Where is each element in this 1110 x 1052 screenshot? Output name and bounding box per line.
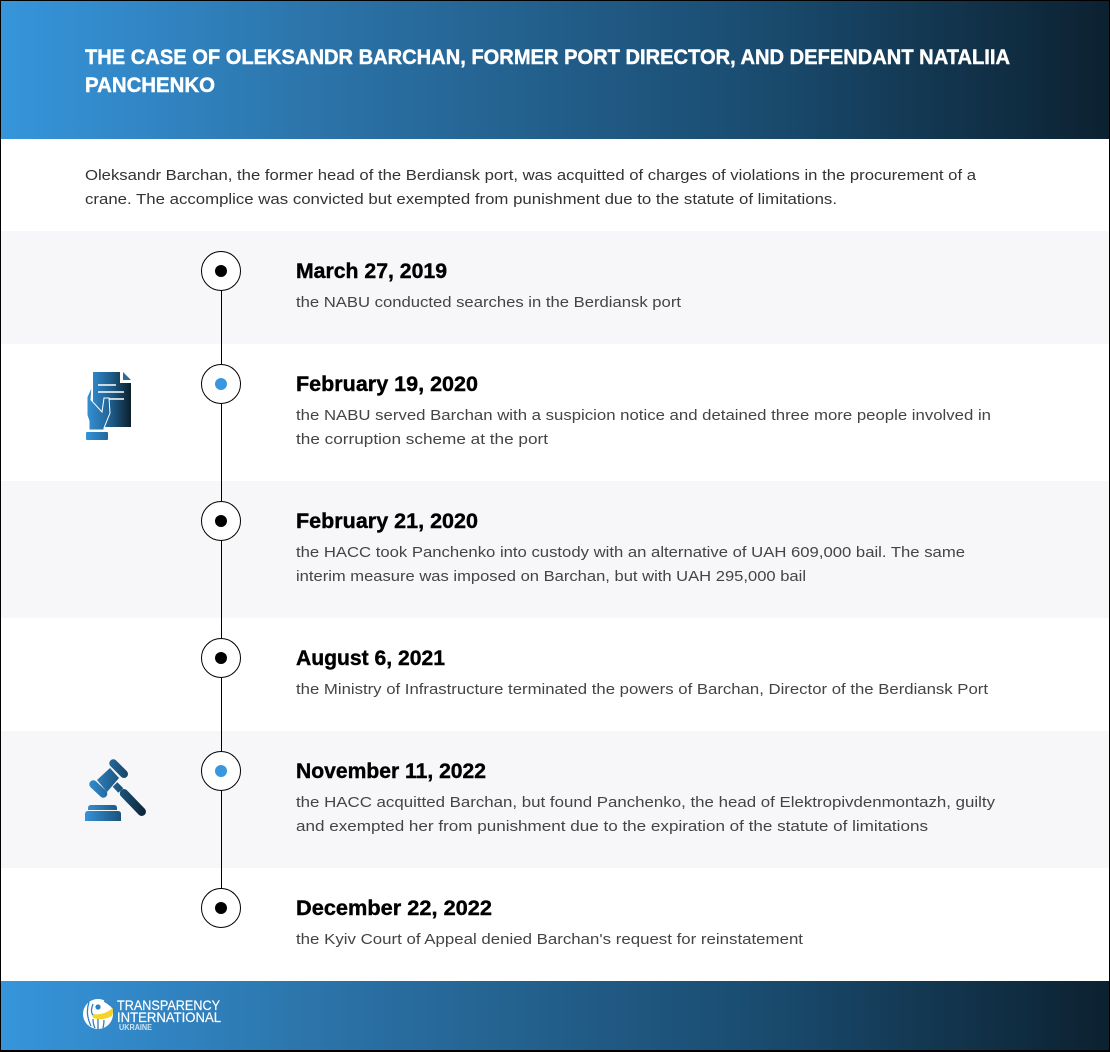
title bbox=[85, 46, 1010, 97]
intro text: Oleksandr Barchan, the former head of the Berdiansk port, was acquitted of charges of violations in the procurement of a bbox=[85, 167, 977, 184]
marker bbox=[202, 252, 240, 290]
marker bbox=[202, 888, 240, 928]
description: the corruption scheme at the port bbox=[296, 431, 549, 448]
description bbox=[296, 407, 991, 448]
date: February 21, 2020 bbox=[296, 510, 478, 533]
date: December 22, 2022 bbox=[296, 897, 492, 920]
description: the NABU served Barchan with a suspicion notice and detained three more people involved in bbox=[296, 407, 991, 424]
event: August 6, 2021 bbox=[202, 638, 989, 698]
description: the Kyiv Court of Appeal denied Barchan's request for reinstatement bbox=[296, 931, 804, 948]
marker bbox=[202, 752, 240, 790]
footer banner bbox=[0, 981, 1110, 1052]
date: March 27, 2019 bbox=[296, 260, 447, 283]
intro text bbox=[85, 167, 977, 208]
logo: Transparency International Ukraine bbox=[83, 997, 221, 1032]
logo wordmark: UKRAINE bbox=[119, 1023, 153, 1032]
event: March 27, 2019 bbox=[202, 252, 682, 311]
logo wordmark: TRANSPARENCY bbox=[117, 997, 221, 1013]
title: PANCHENKO bbox=[85, 74, 215, 97]
intro text: crane. The accomplice was convicted but exempted from punishment due to the statute of limitations. bbox=[85, 191, 837, 208]
description bbox=[296, 544, 965, 585]
event: February 21, 2020 bbox=[202, 502, 965, 585]
event: November 11, 2022 bbox=[202, 752, 996, 835]
event: February 19, 2020 bbox=[202, 364, 991, 448]
description: and exempted her from punishment due to the expiration of the statute of limitations bbox=[296, 818, 928, 835]
marker bbox=[202, 638, 240, 678]
title: THE CASE OF OLEKSANDR BARCHAN, FORMER PORT DIRECTOR, AND DEFENDANT NATALIIA bbox=[85, 46, 1010, 69]
date: August 6, 2021 bbox=[296, 647, 445, 670]
description: the Ministry of Infrastructure terminated the powers of Barchan, Director of the Berdiansk Port bbox=[296, 681, 989, 698]
timeline line bbox=[221, 271, 222, 908]
description: the NABU conducted searches in the Berdiansk port bbox=[296, 294, 682, 311]
date: November 11, 2022 bbox=[296, 760, 486, 783]
description: the HACC acquitted Barchan, but found Panchenko, the head of Elektropivdenmontazh, guilty bbox=[296, 794, 996, 811]
logo wordmark bbox=[117, 997, 221, 1032]
row backgrounds bbox=[0, 231, 1110, 868]
event: December 22, 2022 bbox=[202, 888, 804, 948]
description: interim measure was imposed on Barchan, but with UAH 295,000 bail bbox=[296, 568, 806, 585]
icon: hand holding document bbox=[86, 372, 131, 440]
marker bbox=[202, 502, 240, 540]
description: the HACC took Panchenko into custody with an alternative of UAH 609,000 bail. The same bbox=[296, 544, 965, 561]
logo emblem bbox=[83, 999, 113, 1029]
header banner bbox=[0, 0, 1110, 139]
icon: gavel bbox=[85, 763, 142, 821]
marker bbox=[202, 364, 240, 404]
date: February 19, 2020 bbox=[296, 373, 478, 396]
description bbox=[296, 794, 996, 835]
logo wordmark: INTERNATIONAL bbox=[117, 1009, 221, 1025]
